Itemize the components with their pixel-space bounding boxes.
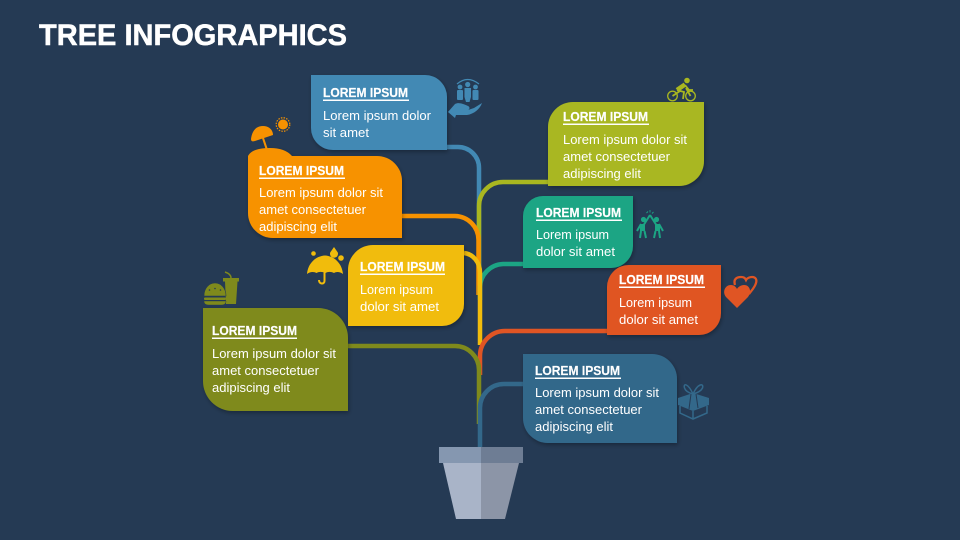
branch: red [480,331,607,375]
olive body text: amet consectetuer [212,363,320,378]
lime body text: amet consectetuer [563,149,671,164]
olive body text: adipiscing elit [212,380,290,395]
branch: yellow [464,253,480,345]
icon: people on a hand [448,80,482,118]
tree branches [348,147,607,449]
icon: beach umbrella and sun [251,118,290,150]
orange body text: adipiscing elit [259,219,337,234]
icon: high five [637,210,663,238]
title: TREE INFOGRAPHICS [39,19,347,52]
blue body text [323,108,432,140]
panel: slate card [523,354,677,443]
olive body text: Lorem ipsum dolor sit [212,346,336,361]
teal heading: LOREM IPSUM [536,205,621,220]
branch: blue [447,147,479,270]
lime body text: Lorem ipsum dolor sit [563,132,687,147]
yellow heading: LOREM IPSUM [360,259,445,274]
yellow body text: dolor sit amet [360,299,439,314]
panel: orange card [248,148,402,238]
orange heading: LOREM IPSUM [259,163,344,178]
panel: yellow card [348,245,464,326]
panel: teal card [523,196,633,268]
yellow body text: Lorem ipsum [360,282,433,297]
icon: gift box [678,385,709,419]
teal body text: dolor sit amet [536,244,615,259]
lime body text [563,132,687,181]
blue body text: sit amet [323,125,369,140]
lime heading: LOREM IPSUM [563,109,648,124]
red body text [619,295,698,327]
orange body text: Lorem ipsum dolor sit [259,185,383,200]
slate body text: amet consectetuer [535,402,643,417]
slate body text [535,385,659,434]
olive body text [212,346,336,395]
blue heading: LOREM IPSUM [323,85,408,100]
teal body text: Lorem ipsum [536,227,609,242]
lime body text: adipiscing elit [563,166,641,181]
panel: red card [607,265,721,335]
branch: orange [402,216,478,295]
branch: olive [348,346,479,424]
icon: cyclist [668,78,695,101]
pot body [443,463,481,519]
panel: blue card [311,75,447,150]
red heading: LOREM IPSUM [619,272,704,287]
branch: slate [480,384,523,449]
pot rim [439,447,481,463]
icon: burger and drink [204,272,239,305]
icon: hearts [724,277,756,308]
slate heading: LOREM IPSUM [535,363,620,378]
olive heading: LOREM IPSUM [212,323,297,338]
panel: lime card [548,102,704,186]
plant pot [439,447,523,519]
branch: teal [480,264,523,300]
slate body text: Lorem ipsum dolor sit [535,385,659,400]
red body text: Lorem ipsum [619,295,692,310]
teal body text [536,227,615,259]
icon: rain umbrella [307,247,344,284]
orange body text [259,185,383,234]
orange body text: amet consectetuer [259,202,367,217]
yellow body text [360,282,439,314]
red body text: dolor sit amet [619,312,698,327]
branch: lime [479,182,548,270]
panel: olive card [203,308,348,411]
blue body text: Lorem ipsum dolor [323,108,432,123]
slate body text: adipiscing elit [535,419,613,434]
